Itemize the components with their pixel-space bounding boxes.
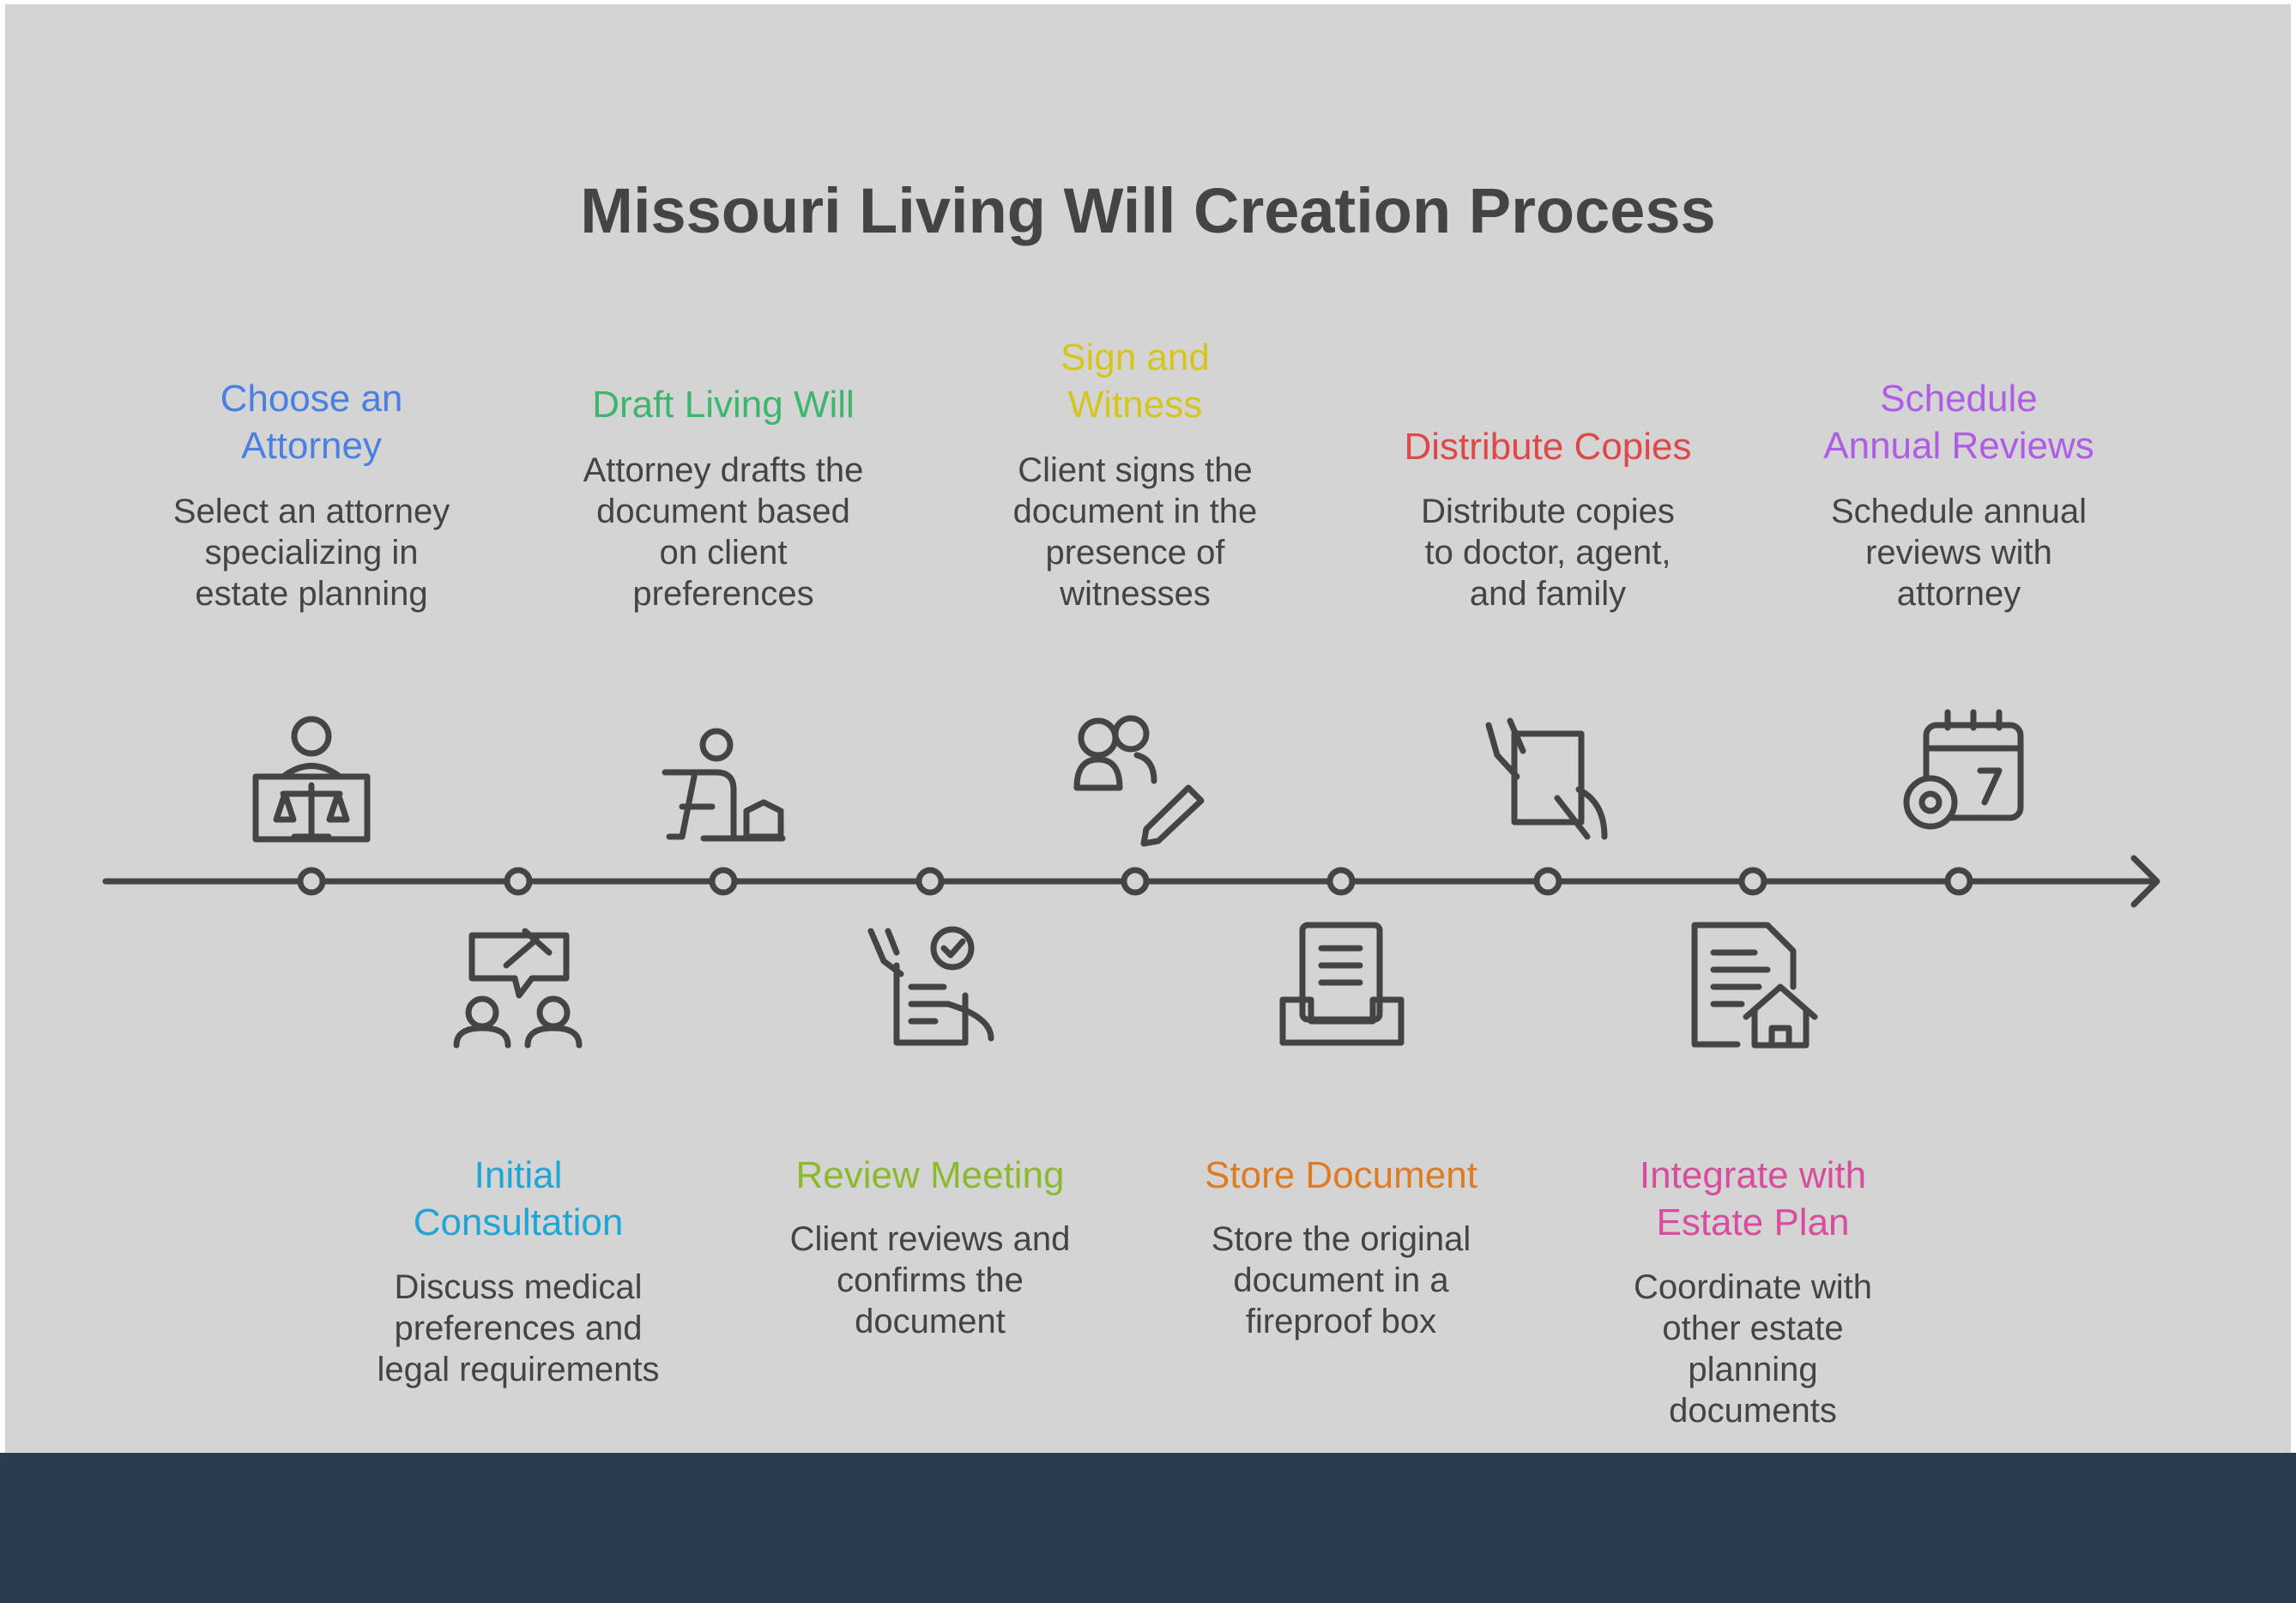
text: Annual Reviews <box>1823 425 2094 467</box>
text: fireproof box <box>1246 1303 1436 1340</box>
text: Witness <box>1068 384 1202 426</box>
text: Sign and <box>1060 336 1210 378</box>
text: witnesses <box>1060 575 1211 613</box>
text: Estate Plan <box>1656 1201 1850 1243</box>
icon: document with house <box>1695 925 1815 1045</box>
icon: review checklist <box>871 929 991 1043</box>
text: Store the original <box>1211 1220 1471 1258</box>
text: documents <box>1669 1392 1837 1430</box>
step: Sign and Witness <box>1013 336 1257 613</box>
text: document in the <box>1013 493 1257 530</box>
text: and family <box>1470 575 1626 613</box>
text: specializing in <box>204 534 419 572</box>
text: Discuss medical <box>395 1268 642 1306</box>
text: Review Meeting <box>795 1154 1065 1196</box>
text: Store Document <box>1205 1154 1477 1196</box>
step: Distribute Copies <box>1404 426 1692 613</box>
text: planning <box>1688 1351 1818 1388</box>
text: Attorney drafts the <box>583 451 863 489</box>
text: Distribute Copies <box>1404 426 1692 468</box>
title: Missouri Living Will Creation Process <box>580 175 1716 246</box>
timeline arrow <box>106 858 2157 904</box>
text: attorney <box>1897 575 2021 613</box>
text: Distribute copies <box>1421 493 1675 530</box>
icon: person at laptop <box>665 731 782 838</box>
step: Draft Living Will <box>583 384 863 613</box>
step: Store Document <box>1205 1154 1477 1340</box>
icon: calendar with gear <box>1906 712 2021 826</box>
text: reviews with <box>1865 534 2052 572</box>
text: Select an attorney <box>173 493 450 530</box>
text: Consultation <box>414 1201 623 1243</box>
text: estate planning <box>195 575 428 613</box>
text: confirms the <box>837 1261 1024 1299</box>
text: Attorney <box>241 425 382 467</box>
step: Initial Consultation <box>377 1154 660 1388</box>
text: Choose an <box>221 378 402 420</box>
step: Review Meeting <box>790 1154 1070 1340</box>
text: Client signs the <box>1018 451 1253 489</box>
step: Integrate with Estate Plan <box>1634 1154 1872 1430</box>
text: Schedule <box>1880 378 2038 420</box>
text: other estate <box>1662 1310 1844 1347</box>
text: preferences <box>632 575 814 613</box>
text: Initial <box>474 1154 562 1196</box>
text: Integrate with <box>1640 1154 1866 1196</box>
text: Client reviews and <box>790 1220 1070 1258</box>
icon: people with pen <box>1077 718 1201 844</box>
step: Choose an Attorney <box>173 378 450 613</box>
icon: hands holding document <box>1489 721 1604 837</box>
text: Draft Living Will <box>592 384 855 426</box>
text: document in a <box>1233 1261 1449 1299</box>
text: document <box>855 1303 1006 1340</box>
icon: attorney with scales <box>256 719 367 839</box>
text: presence of <box>1045 534 1225 572</box>
text: legal requirements <box>377 1351 660 1388</box>
icon: document in tray <box>1283 925 1401 1043</box>
text: preferences and <box>394 1310 643 1347</box>
text: Coordinate with <box>1634 1268 1872 1306</box>
footer band <box>0 1453 2296 1603</box>
text: Schedule annual <box>1831 493 2087 530</box>
step: Schedule Annual Reviews <box>1823 378 2094 613</box>
icon: consultation with gavel <box>456 931 579 1045</box>
text: on client <box>659 534 787 572</box>
text: to doctor, agent, <box>1425 534 1671 572</box>
text: document based <box>596 493 850 530</box>
